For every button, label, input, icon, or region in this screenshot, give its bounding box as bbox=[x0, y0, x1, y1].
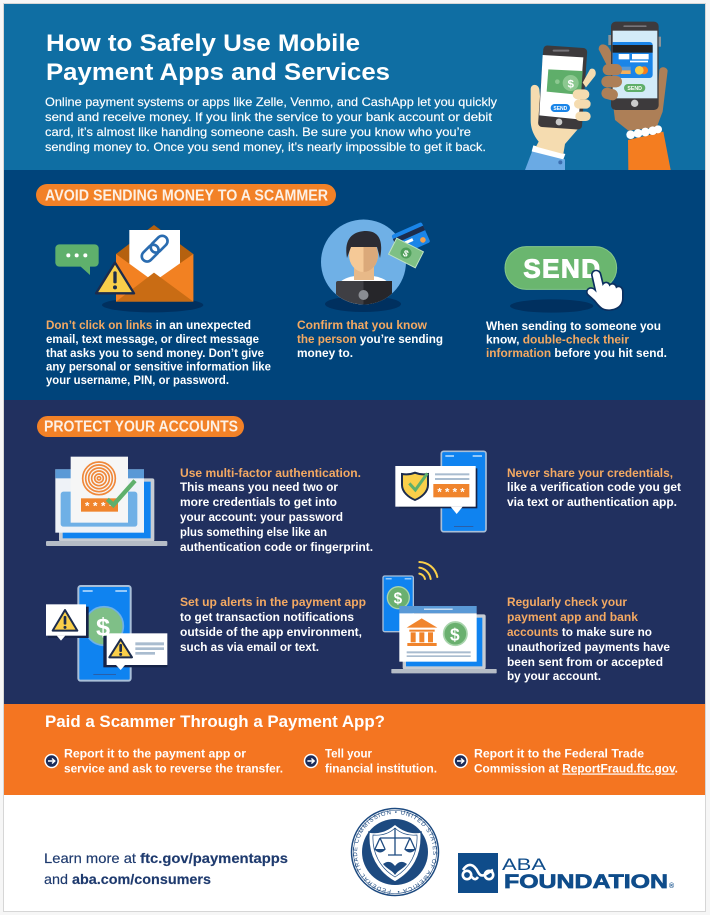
text: regularly check your accounts: Regularly check your bbox=[507, 595, 627, 609]
text: set up alerts bbox=[180, 595, 366, 654]
step: report to the payment app: Report it to the payment app or bbox=[64, 746, 246, 760]
text: confirm that you know the person: the person you’re sending bbox=[297, 332, 443, 346]
icon: phone with shield and password bbox=[395, 451, 486, 532]
text: regularly check your accounts bbox=[507, 595, 670, 683]
text: learn more links: and aba.com/consumers bbox=[44, 871, 211, 887]
heading: avoid sending money: AVOID SENDING MONEY TO A SCAMMER bbox=[45, 188, 328, 204]
intro text: send and receive money. If you link the service to your bank account or debit bbox=[45, 110, 493, 124]
text: double-check their information: information before you hit send. bbox=[486, 346, 667, 360]
text: multi-factor authentication: This means you need two or bbox=[180, 480, 338, 494]
text: regularly check your accounts: by your account. bbox=[507, 669, 601, 683]
text: regularly check your accounts: been sent from or accepted bbox=[507, 655, 663, 669]
text: don't click on links: any personal or sensitive information like bbox=[46, 360, 271, 374]
step: report to the FTC bbox=[454, 746, 678, 776]
icon: hands holding phones: SEND bbox=[627, 86, 642, 92]
step: report to the FTC: Report it to the Federal Trade bbox=[474, 746, 644, 760]
icon: send button with hand cursor bbox=[505, 247, 622, 313]
text: don't click on links: email, text message, or direct message bbox=[46, 332, 259, 346]
logo: ABA Foundation bbox=[458, 853, 675, 893]
icon: hands holding phones bbox=[525, 22, 671, 170]
icon: phone and laptop with bank: $ bbox=[450, 624, 460, 644]
text: confirm that you know the person: money to. bbox=[297, 346, 353, 360]
panel: paid a scammer bbox=[4, 704, 705, 795]
panel: avoid sending money to a scammer bbox=[4, 170, 705, 400]
step: report to the payment app: service and ask to reverse the transfer. bbox=[64, 762, 283, 776]
icon: laptop with fingerprint and password bbox=[46, 457, 167, 546]
text: regularly check your accounts: payment app and bank bbox=[507, 610, 638, 624]
text: multi-factor authentication: Use multi-factor authentication. bbox=[180, 466, 361, 480]
text: don't click on links: your username, PIN, or password. bbox=[46, 373, 229, 387]
icon: phone with alerts: $ bbox=[96, 613, 110, 641]
intro text: sending money to. Once you send money, it’s nearly impossible to get it back. bbox=[45, 140, 486, 154]
heading: protect your accounts: PROTECT YOUR ACCOUNTS bbox=[44, 418, 238, 436]
intro text: Online payment systems or apps like Zelle, Venmo, and CashApp let you quickly bbox=[45, 95, 497, 109]
text: learn more links: Learn more at ftc.gov/paymentapps bbox=[44, 850, 288, 866]
step: tell your financial institution: financial institution. bbox=[325, 762, 437, 776]
panel: header bbox=[4, 4, 705, 170]
step: tell your financial institution bbox=[304, 746, 437, 776]
text: confirm that you know the person bbox=[297, 318, 443, 360]
title: Payment Apps and Services bbox=[46, 59, 390, 86]
icon: phone with alerts bbox=[46, 586, 167, 681]
intro text: card, it’s almost like handing someone cash. Be sure you know who you’re bbox=[45, 125, 471, 139]
title bbox=[46, 30, 390, 86]
heading: paid a scammer: Paid a Scammer Through a Payment App? bbox=[45, 713, 385, 731]
text: set up alerts: Set up alerts in the payment app bbox=[180, 595, 366, 609]
panel: protect your accounts bbox=[4, 400, 705, 704]
text: never share your credentials bbox=[507, 466, 681, 509]
icon: laptop with fingerprint and password: **** bbox=[85, 500, 114, 512]
text: regularly check your accounts: accounts to make sure no bbox=[507, 625, 652, 639]
step: tell your financial institution: Tell your bbox=[325, 746, 372, 760]
logo: ABA Foundation: ® bbox=[669, 882, 675, 890]
text: multi-factor authentication: authentication code or fingerprint. bbox=[180, 540, 373, 554]
text: never share your credentials: Never share your credentials, bbox=[507, 466, 673, 480]
icon: send button with hand cursor: SEND bbox=[523, 253, 600, 283]
icon: hands holding phones: SEND bbox=[553, 106, 567, 112]
icon: person at laptop with card and cash: $ bbox=[401, 248, 410, 259]
logo: ABA Foundation: FOUNDATION bbox=[504, 872, 668, 893]
title: How to Safely Use Mobile bbox=[46, 30, 360, 57]
text: set up alerts: to get transaction notifications bbox=[180, 610, 354, 624]
text: set up alerts: outside of the app environment, bbox=[180, 625, 362, 639]
logo: FTC seal: FEDERAL TRADE COMMISSION • UNITED STATES OF AMERICA • MCMXV bbox=[352, 810, 438, 894]
text: don't click on links: that asks you to send money. Don’t give bbox=[46, 346, 264, 360]
icon: phone with shield and password: **** bbox=[437, 486, 465, 498]
text: never share your credentials: via text or authentication app. bbox=[507, 495, 677, 509]
text: multi-factor authentication: more credentials to get into bbox=[180, 495, 337, 509]
step: report to the payment app bbox=[45, 746, 283, 776]
icon: person at laptop with card and cash bbox=[321, 220, 430, 312]
intro text bbox=[45, 95, 497, 154]
icon: envelope with link and warning bbox=[55, 225, 203, 312]
icon: phone and laptop with bank bbox=[383, 562, 497, 673]
text: regularly check your accounts: unauthorized payments have bbox=[507, 640, 670, 654]
text: multi-factor authentication: plus something else like an bbox=[180, 525, 327, 539]
icon: hands holding phones: $ bbox=[568, 78, 575, 90]
text: set up alerts: such as via email or text. bbox=[180, 640, 319, 654]
step: report to the FTC: Commission at ReportFraud.ftc.gov. bbox=[474, 762, 678, 776]
logo: ABA Foundation: ABA bbox=[502, 855, 547, 874]
text: double-check their information: When sending to someone you bbox=[486, 319, 661, 333]
logo: FTC seal bbox=[350, 808, 440, 896]
text: don't click on links bbox=[46, 318, 271, 387]
icon: phone and laptop with bank: $ bbox=[394, 591, 403, 608]
text: double-check their information: know, double-check their bbox=[486, 332, 629, 346]
text: double-check their information bbox=[486, 319, 667, 360]
text: confirm that you know the person: Confirm that you know bbox=[297, 318, 428, 332]
text: multi-factor authentication: your account: your password bbox=[180, 510, 343, 524]
text: multi-factor authentication bbox=[180, 466, 373, 554]
text: learn more links bbox=[44, 850, 288, 887]
text: don't click on links: Don’t click on links in an unexpected bbox=[46, 318, 251, 332]
text: never share your credentials: like a verification code you get bbox=[507, 480, 681, 494]
